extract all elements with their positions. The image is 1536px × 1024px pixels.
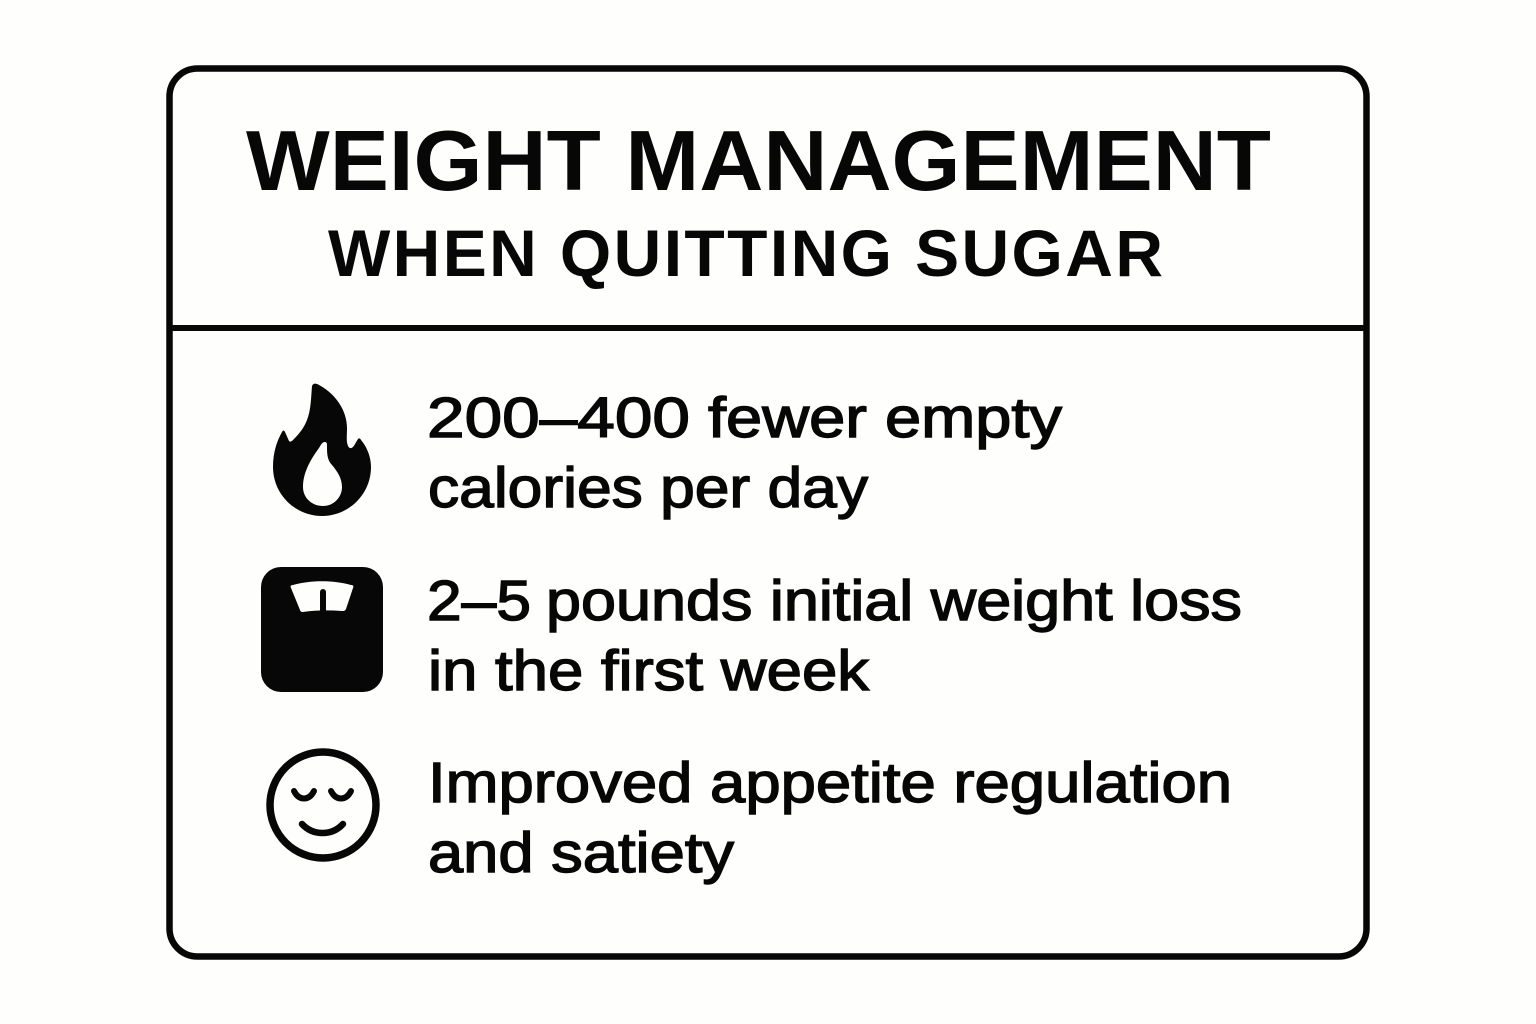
icon: calm smiling face: [270, 752, 376, 858]
item 2 text: [427, 569, 1242, 703]
icon: flame: [273, 384, 371, 516]
title: WEIGHT MANAGEMENT: [246, 114, 1271, 209]
item 1 text: calories per day: [428, 456, 869, 520]
subtitle: WHEN QUITTING SUGAR: [328, 216, 1163, 290]
item 3 text: Improved appetite regulation: [428, 751, 1232, 815]
item 2 text: 2–5: [427, 569, 531, 633]
item 2 text: pounds initial weight loss: [546, 569, 1242, 633]
panel: main card: [170, 68, 1366, 956]
item 1 text: [427, 386, 1063, 520]
item 2 text: in the first week: [428, 639, 870, 703]
item 3 text: and satiety: [428, 821, 735, 885]
icon: bathroom scale: [261, 567, 383, 692]
item 1 text: 200–400: [427, 386, 690, 450]
item 3 text: [428, 751, 1232, 885]
item 1 text: fewer empty: [708, 386, 1063, 450]
